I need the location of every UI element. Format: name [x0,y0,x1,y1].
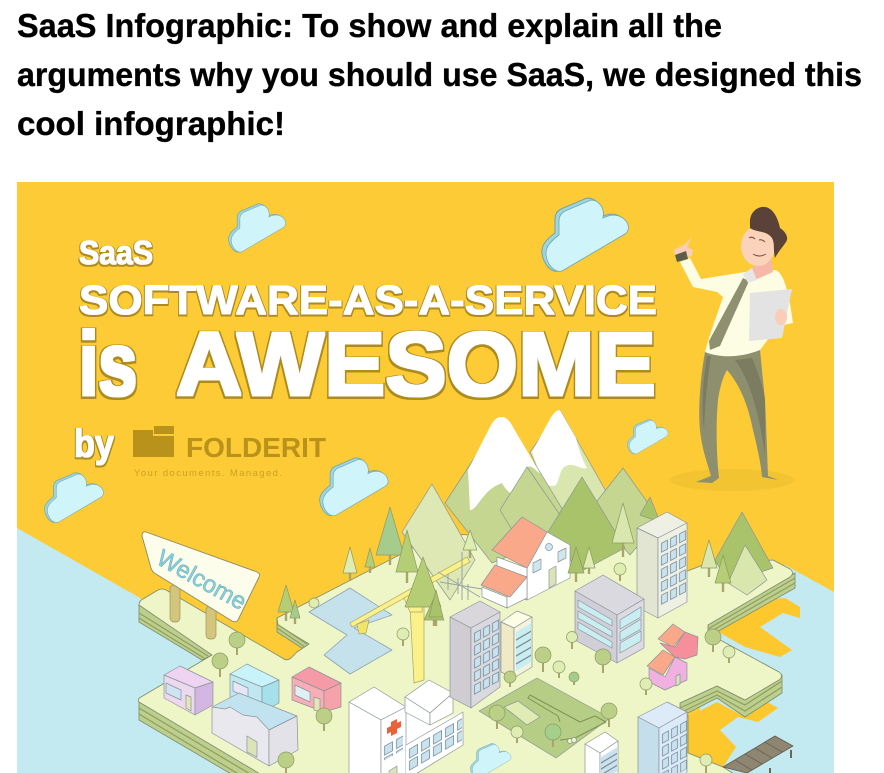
shop: pink [292,667,341,712]
mini houses: pink [647,624,698,690]
heading: SaaS is awesome: SOFTWARE-AS-A-SERVICE [79,277,657,323]
sign: welcome: Welcome [152,545,251,616]
dock [723,736,793,773]
heading: SaaS is awesome [79,234,657,415]
icon: folder logo [133,426,174,457]
byline: by Folderit: Your documents. Managed. [134,468,282,479]
title: arguments why you should use SaaS, we designed this [17,56,862,93]
pond [309,588,392,674]
byline: by Folderit: FOLDERIT [186,432,326,463]
clouds [45,198,668,523]
land with layered edges [138,534,795,773]
heading: SaaS is awesome: SaaS [79,234,153,271]
office: grey with blue bands [575,575,644,663]
round trees [212,563,735,773]
tower: cream with stripes [501,611,532,678]
warehouse with wavy roof [212,693,298,766]
yellow background [17,182,834,773]
shop: purple [164,666,213,715]
byline: by Folderit: by [74,423,114,466]
icon: red cross [387,719,401,736]
small cloud on land [470,743,511,773]
mountains [402,410,660,600]
heading: SaaS is awesome: is [79,315,137,415]
water [17,528,834,773]
byline: by Folderit [74,423,326,479]
park [479,678,610,758]
small shops [164,664,341,766]
cone trees [278,503,731,626]
hospital [349,680,463,773]
crane [350,552,482,683]
right back mountain [715,512,773,595]
shop: blue [230,664,279,712]
heading: SaaS is awesome: AWESOME [176,315,656,415]
infographic artwork [17,182,834,773]
tower: blue bottom [638,702,687,773]
tower: tall pale [637,512,687,618]
title: SaaS Infographic: To show and explain all the [17,7,722,44]
title: cool infographic! [17,105,285,142]
tower: white bottom [585,732,618,773]
sign: welcome [142,532,260,639]
house: white with orange roof [481,517,570,608]
character: man with paper [670,207,794,491]
yellow reflections in the water [700,598,800,766]
title [17,7,862,142]
tower: grey [450,601,500,708]
